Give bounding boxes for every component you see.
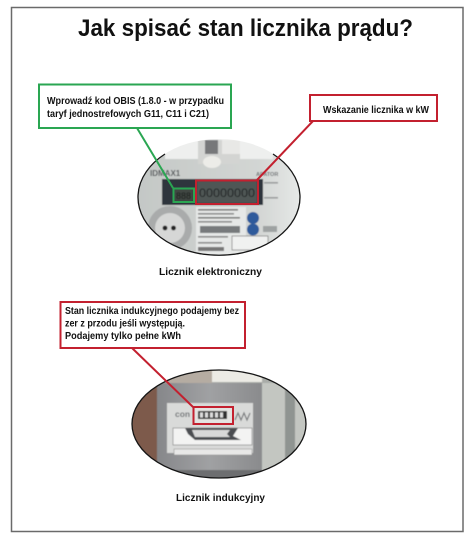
induction meter photo (132, 370, 306, 478)
callout: OBIS code: taryf jednostrefowych G11, C11 i C21) (47, 109, 209, 120)
callout: OBIS code (39, 84, 231, 128)
green highlight: OBIS code (174, 188, 194, 202)
red pointer line: induction meter (132, 348, 193, 407)
red highlight: induction meter reading (194, 407, 233, 424)
callout: reading in kW: Wskazanie licznika w kW (323, 105, 430, 116)
electronic meter photo (138, 139, 300, 255)
electronic meter photo: IDMAX1 (150, 169, 181, 178)
callout: reading in kW (310, 95, 437, 121)
red pointer line (257, 121, 313, 180)
callout: induction meter: zer z przodu jeśli występują. (65, 318, 185, 330)
caption: induction meter: Licznik indukcyjny (176, 492, 265, 504)
electronic meter photo: APATOR (256, 172, 278, 178)
title: Jak spisać stan licznika prądu? (78, 15, 413, 42)
callout: induction meter: Podajemy tylko pełne kWh (65, 331, 181, 342)
induction meter photo: con (175, 409, 190, 419)
callout: induction meter: Stan licznika indukcyjnego podajemy bez (65, 306, 239, 317)
electronic meter photo: 00000000 (199, 186, 255, 200)
callout: OBIS code: Wprowadź kod OBIS (1.8.0 - w przypadku (47, 96, 224, 107)
green pointer line (137, 128, 173, 188)
callout: induction meter (60, 302, 245, 348)
caption: electronic meter: Licznik elektroniczny (159, 266, 262, 278)
red highlight: meter reading (196, 180, 258, 204)
electronic meter photo: 888 (176, 191, 191, 201)
